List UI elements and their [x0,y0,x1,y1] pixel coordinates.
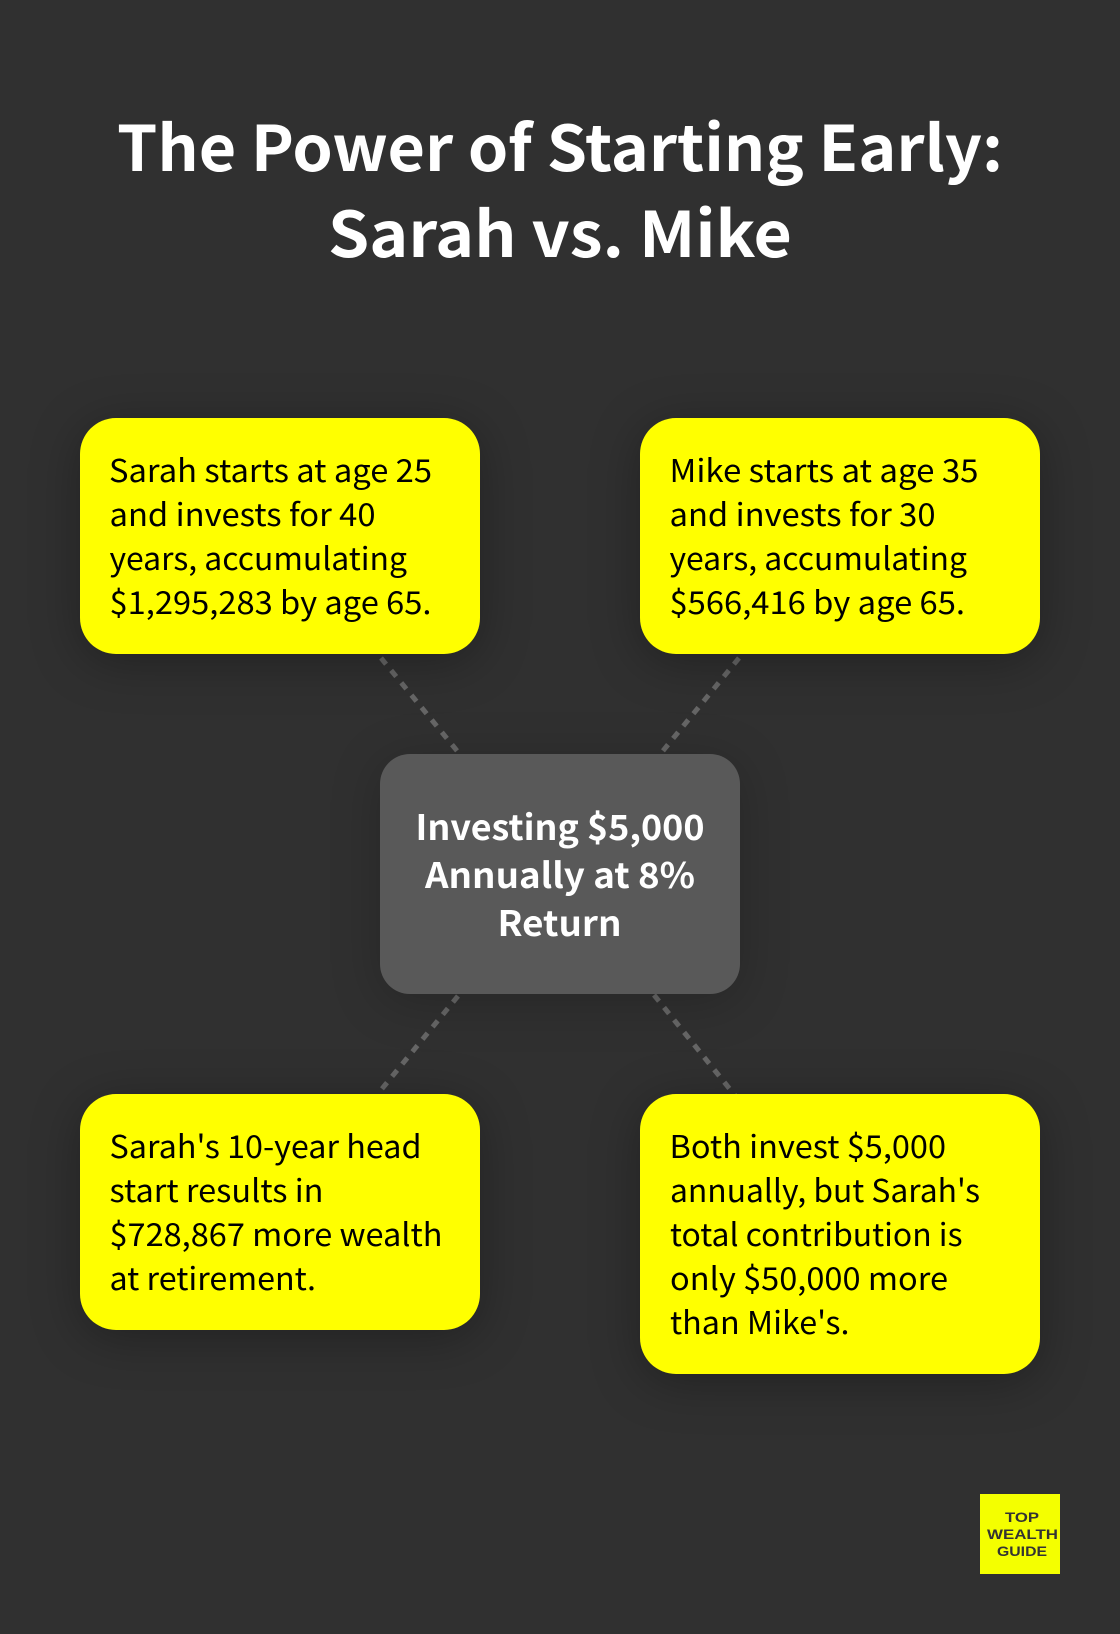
panel: Mike starts at 35: and invests for 30 [670,490,936,536]
connector: contribution card to center [654,995,737,1098]
logo: Top Wealth Guide: TOP [1005,1509,1039,1525]
panel: total contribution comparison: Both invest $5,000 [670,1122,946,1168]
logo: Top Wealth Guide [980,1494,1060,1574]
panel: center investing assumption: Investing $5,000 [416,800,704,851]
panel: total contribution comparison [640,1094,1040,1374]
panel: Mike starts at 35 [640,418,1040,654]
connector: Sarah card to center [381,658,458,752]
logo: Top Wealth Guide: GUIDE [997,1543,1047,1559]
title: The Power of Starting Early: [117,99,1003,190]
panel: Sarah starts at 25 [80,418,480,654]
panel: Mike starts at 35: $566,416 by age 65. [670,578,965,624]
panel: Sarah starts at 25: Sarah starts at age 25 [109,446,432,492]
panel: center investing assumption: Return [498,896,622,947]
panel: center investing assumption [380,754,740,994]
panel: Sarah starts at 25: years, accumulating [110,534,407,580]
panel: Mike starts at 35: years, accumulating [670,534,967,580]
panel: total contribution comparison: only $50,000 more [670,1254,948,1300]
panel: center investing assumption: Annually at 8% [424,848,695,899]
panel: 10-year head start: $728,867 more wealth [110,1210,442,1256]
title [117,99,1003,276]
panel: total contribution comparison: than Mike's. [670,1298,850,1344]
panel: Mike starts at 35: Mike starts at age 35 [670,446,978,492]
panel: 10-year head start: Sarah's 10-year head [110,1122,422,1168]
connector: Mike card to center [662,658,739,752]
panel: Sarah starts at 25: and invests for 40 [110,490,376,536]
panel: Sarah starts at 25: $1,295,283 by age 65. [110,578,432,624]
panel: total contribution comparison: total contribution is [670,1210,962,1256]
panel: total contribution comparison: annually, but Sarah's [670,1166,980,1212]
panel: 10-year head start [80,1094,480,1330]
panel: 10-year head start: at retirement. [110,1254,316,1300]
panel: 10-year head start: start results in [110,1166,324,1212]
connector: head start card to center [381,996,458,1090]
logo: Top Wealth Guide: WEALTH [987,1526,1058,1542]
title: Sarah vs. Mike [328,185,792,276]
